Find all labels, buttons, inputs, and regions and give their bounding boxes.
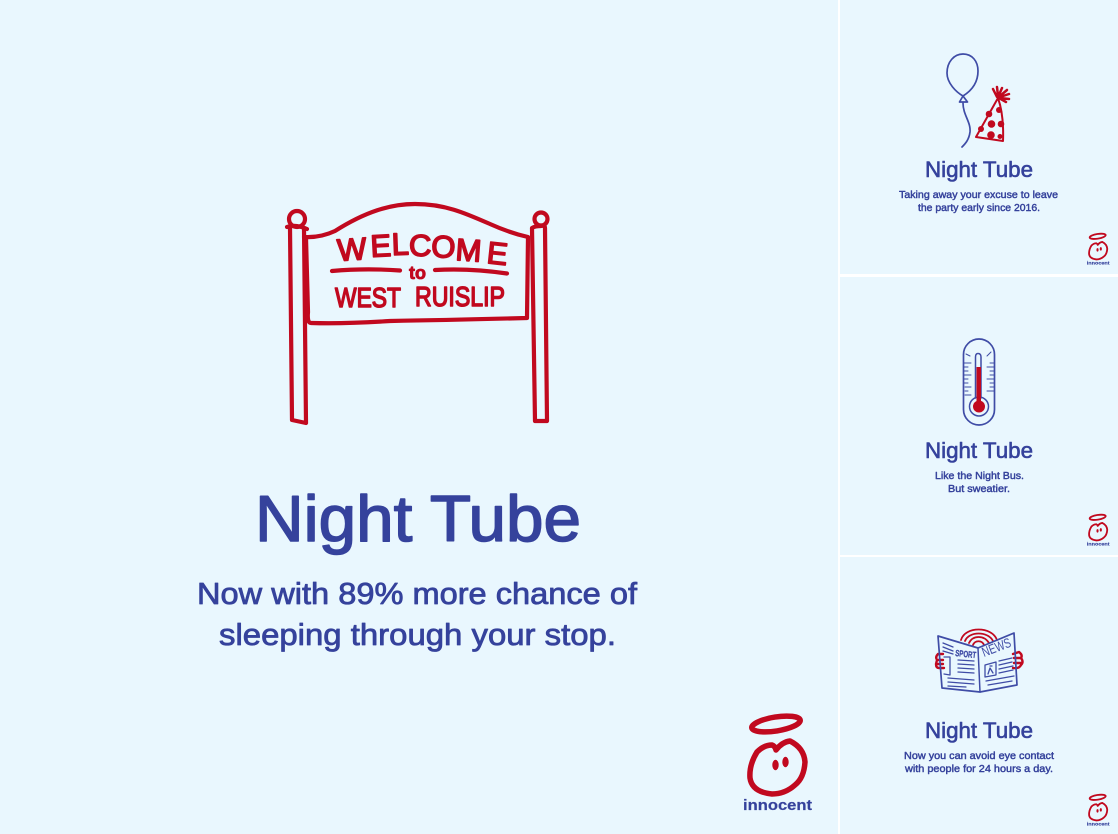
tagline: Now with 89% more chance of — [197, 576, 637, 611]
logo: innocent small: innocent — [1087, 822, 1110, 828]
panel: thermometer ad — [840, 277, 1118, 555]
icon: newspaper: SPORT — [955, 648, 977, 660]
body text: the party early since 2016. — [918, 202, 1040, 214]
logo: innocent small: innocent — [1087, 542, 1110, 548]
icon: welcome sign — [287, 204, 548, 423]
logo: innocent small — [1087, 514, 1110, 548]
sign lettering — [335, 226, 510, 313]
body text — [904, 750, 1054, 775]
icon: thermometer — [964, 339, 994, 425]
panel: main West Ruislip ad — [0, 0, 838, 834]
heading: Night Tube — [925, 157, 1033, 182]
logo: innocent small — [1087, 233, 1110, 267]
icon: balloon — [947, 54, 978, 147]
body text — [935, 470, 1024, 495]
icon: party hat — [976, 87, 1009, 141]
body text: with people for 24 hours a day. — [904, 763, 1053, 775]
body text: Taking away your excuse to leave — [899, 189, 1058, 201]
body text: Now you can avoid eye contact — [904, 750, 1054, 762]
icon: newspaper — [936, 630, 1022, 692]
sign lettering: to — [409, 263, 426, 283]
logo: innocent small: innocent — [1087, 261, 1110, 267]
sign lettering: WEST — [335, 282, 401, 313]
tagline — [197, 576, 637, 652]
sign lettering: RUISLIP — [415, 281, 505, 312]
panel: party ad — [840, 0, 1118, 274]
body text: Like the Night Bus. — [935, 470, 1024, 482]
logo: innocent — [743, 713, 812, 814]
sign lettering: WELCOME — [336, 226, 510, 272]
logo: innocent: innocent — [743, 797, 812, 814]
heading: Night Tube — [925, 718, 1033, 743]
icon: newspaper: NEWS — [980, 635, 1013, 660]
tagline: sleeping through your stop. — [219, 617, 616, 652]
logo: innocent small — [1087, 794, 1110, 828]
heading: Night Tube — [925, 438, 1033, 463]
title: Night Tube — [255, 482, 581, 555]
body text: But sweatier. — [948, 483, 1010, 495]
panel: newspaper ad — [840, 557, 1118, 834]
body text — [899, 189, 1058, 214]
